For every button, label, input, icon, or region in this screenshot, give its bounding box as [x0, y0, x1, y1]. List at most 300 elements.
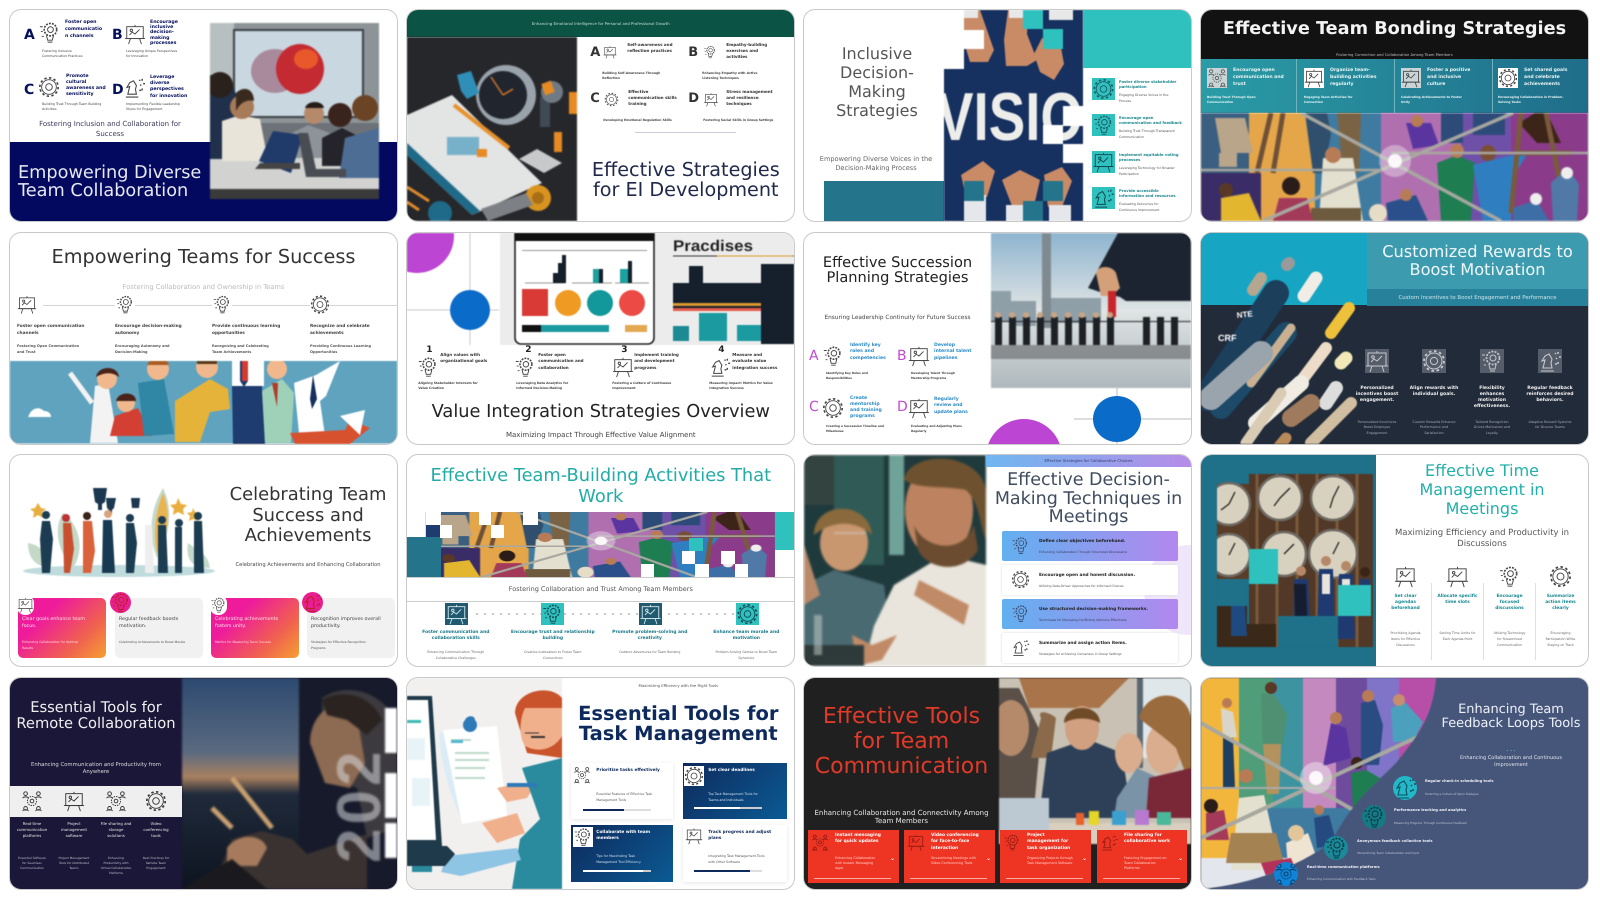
heading: engagement. — [1360, 398, 1394, 403]
icon: presentation board — [124, 24, 146, 44]
panel: Effective Succession Planning Strategies — [804, 232, 1191, 444]
caption: Informed Decision-Making — [516, 386, 562, 390]
heading: Flexibility — [1479, 386, 1505, 390]
caption — [504, 650, 601, 662]
heading: motivation — [733, 636, 760, 641]
heading: Encourage — [150, 20, 178, 25]
title: Remote Collaboration — [16, 715, 176, 732]
column 3 — [1465, 348, 1519, 438]
heading: pipelines — [934, 356, 958, 361]
caption: Fostering a Culture of Open Dialogue — [1425, 792, 1479, 796]
caption — [407, 650, 504, 662]
progress bar — [694, 806, 762, 808]
subtitle — [39, 120, 181, 138]
caption: Engagement — [1366, 431, 1388, 435]
title — [18, 163, 201, 201]
caption — [602, 71, 660, 80]
heading: Allocate specific — [1437, 594, 1478, 599]
letter D: D — [688, 91, 699, 106]
heading: Foster open communication — [17, 324, 84, 328]
heading — [726, 89, 773, 106]
caption: Connection — [1304, 100, 1323, 104]
heading: File sharing and — [101, 820, 131, 826]
caption: Opportunities — [310, 350, 337, 354]
heading: Encourage open and honest discussion. — [1039, 573, 1135, 578]
icon — [685, 826, 703, 844]
caption: Teams and Individuals — [708, 798, 744, 802]
heading: and resilience — [726, 95, 759, 100]
caption: Identifying Key Roles and — [826, 370, 868, 374]
letter C: C — [590, 91, 600, 106]
photo: hand placing a red pawn above a row of figures — [991, 232, 1191, 388]
caption — [17, 342, 79, 354]
tool 3 — [1000, 830, 1091, 882]
icon — [21, 790, 43, 812]
icon — [417, 356, 439, 378]
icon box — [1092, 187, 1115, 209]
caption — [126, 102, 180, 111]
item A — [809, 342, 894, 384]
caption: Enhancing Communication Through — [427, 650, 484, 654]
letter D: D — [112, 82, 124, 98]
heading — [440, 352, 487, 364]
caption: Video Conferencing Tools — [931, 861, 972, 865]
icon — [811, 833, 829, 852]
heading — [596, 830, 650, 842]
caption: Platforms — [1124, 866, 1140, 870]
decorative circles — [944, 382, 1191, 444]
icon: book — [604, 46, 616, 58]
icon circle — [1324, 836, 1348, 860]
caption — [1119, 166, 1175, 177]
tool 4 — [683, 824, 787, 882]
heading: communication and — [1233, 75, 1284, 80]
heading: autonomy — [115, 330, 139, 336]
heading: Foster open — [538, 352, 566, 356]
caption: Developing Talent Through — [911, 370, 955, 374]
activity 1 — [407, 603, 504, 663]
heading — [634, 352, 679, 371]
panel: Effective Time Management in Meetings — [1201, 455, 1588, 666]
heading: and training — [850, 408, 882, 413]
tool 1 — [571, 762, 673, 818]
photo: man at a laptop overlooking a night city, with 202 numerals — [182, 678, 397, 888]
letter B: B — [112, 27, 123, 43]
caption: Enhancing Collaboration Through Structured Discussions — [1039, 550, 1127, 554]
letter: A — [809, 348, 819, 364]
caption: Engagement — [146, 866, 166, 870]
decorative circles and dashboard photo — [407, 232, 794, 344]
heading: Define clear objectives beforehand. — [1039, 539, 1125, 544]
heading: channels — [17, 330, 39, 336]
caption: Participation While — [1546, 637, 1575, 641]
heading — [1485, 594, 1534, 613]
heading: perspectives — [150, 87, 184, 92]
caption: Aligning Stakeholder Interests for — [418, 380, 478, 384]
caption — [1536, 631, 1585, 649]
icon box — [1092, 114, 1115, 136]
letter: B — [897, 348, 907, 364]
caption: Team Achievements — [212, 350, 251, 354]
tool 2 — [683, 762, 787, 818]
caption: Techniques for Managing Conflicting Opinions Effectively — [1039, 618, 1127, 622]
caption — [22, 640, 78, 651]
caption: for Seamless — [22, 860, 42, 864]
caption — [115, 342, 170, 354]
caption — [1401, 95, 1462, 105]
heading: Align values with — [440, 352, 480, 356]
caption: with Instant Messaging — [835, 861, 873, 865]
heading: Video conferencing — [931, 833, 979, 838]
heading — [726, 42, 767, 59]
icon — [573, 766, 591, 784]
heading: programs — [850, 414, 875, 419]
icon — [907, 833, 925, 852]
subtitle: Team Members — [875, 817, 928, 825]
heading — [119, 616, 178, 630]
heading: Self-awareness and — [627, 42, 673, 47]
caption — [709, 380, 773, 391]
heading — [311, 616, 381, 630]
heading: Recognize and celebrate — [310, 324, 370, 328]
caption: Discussions — [1396, 643, 1415, 647]
heading: training — [628, 101, 647, 106]
chevron: ⌄ — [1178, 855, 1183, 862]
heading: communication — [17, 826, 47, 832]
caption — [136, 856, 176, 870]
caption: Communication — [1497, 643, 1522, 647]
caption: Participation — [1119, 172, 1139, 176]
caption: Apps — [835, 866, 843, 870]
heading: Set clear deadlines — [708, 768, 755, 772]
title: Strategies — [836, 101, 918, 120]
heading — [136, 820, 176, 838]
heading: Anonymous feedback collection tools — [1357, 838, 1433, 842]
subtitle: Enhancing Collaboration and Connectivity Among — [814, 808, 989, 816]
column 3 — [1395, 59, 1493, 113]
caption: Productivity with — [103, 860, 129, 864]
heading: platforms — [23, 832, 41, 838]
icon — [612, 356, 634, 378]
heading: Foster a positive — [1427, 68, 1470, 73]
caption: Tailored Recognition — [1475, 420, 1509, 424]
caption: Prioritizing Agenda — [1390, 631, 1421, 635]
subtitle: Custom Incentives to Boost Engagement and Performance — [1399, 294, 1556, 300]
heading: techniques — [726, 101, 752, 106]
heading: achievements — [310, 330, 344, 336]
heading: decision- — [150, 30, 174, 35]
tool 4 — [136, 788, 176, 880]
heading: information and resources — [1119, 193, 1176, 198]
caption: Remote Team — [146, 860, 166, 864]
step 2 — [514, 346, 609, 392]
caption: Custom Rewards Enhance — [1413, 420, 1455, 424]
caption: Providing Continuous Learning — [310, 344, 371, 348]
caption — [418, 380, 478, 391]
icon box — [1092, 151, 1115, 173]
heading: exercises and — [726, 48, 758, 53]
icon: gear bulb — [40, 22, 58, 43]
caption: Celebrating Achievements to Foster — [1401, 95, 1462, 99]
title: Achievements — [245, 525, 371, 546]
teal header block — [1201, 232, 1588, 304]
heading: programs — [634, 364, 656, 370]
subtitle — [1376, 528, 1588, 550]
caption: Building Self-Awareness Through — [602, 71, 660, 75]
caption: Fostering a Culture of Continuous — [612, 380, 671, 384]
title: Success and — [252, 504, 364, 526]
caption — [1433, 631, 1482, 643]
icon circle — [1274, 862, 1298, 886]
panel: Effective Team Bonding Strategies — [1201, 10, 1588, 221]
caption: Teams — [69, 866, 79, 870]
caption — [911, 370, 955, 380]
item C — [24, 74, 106, 111]
title: Boost Motivation — [1409, 260, 1546, 278]
heading: building — [542, 636, 563, 641]
black header — [1201, 10, 1588, 59]
heading: Develop — [934, 342, 955, 348]
caption: Loyalty — [1486, 431, 1498, 435]
panel: Empowering Diverse Team Collaboration — [10, 10, 397, 221]
title: Management in — [1419, 480, 1545, 499]
caption — [596, 790, 652, 803]
icon — [1304, 68, 1324, 88]
subtitle: Improvement — [1494, 762, 1528, 768]
icon — [1207, 68, 1227, 88]
icon — [63, 790, 85, 812]
icon — [709, 356, 731, 378]
panel: Effective Strategies for EI Development — [407, 10, 794, 221]
subtitle — [804, 808, 999, 826]
heading: inclusive — [150, 25, 173, 30]
caption — [1124, 856, 1167, 871]
heading — [732, 352, 777, 371]
activity 2 — [504, 603, 601, 663]
caption: Team Collaboration — [1124, 861, 1156, 865]
card 4 — [307, 598, 395, 658]
subtitle: Discussions — [1457, 539, 1507, 549]
heading: File sharing for — [1124, 833, 1162, 838]
heading: Stress management — [726, 89, 773, 94]
heading — [1124, 833, 1170, 846]
heading — [150, 74, 187, 99]
panel: Essential Tools for Remote Collaboration — [10, 678, 397, 888]
caption: Building Trust Through Team Building — [42, 102, 101, 106]
number: 3 — [621, 344, 628, 354]
heading: awareness and — [66, 86, 106, 91]
item 4 — [1092, 187, 1187, 216]
step 1 — [17, 292, 107, 358]
heading — [22, 616, 85, 630]
heading — [115, 322, 182, 336]
heading: Create — [850, 396, 867, 400]
heading: management — [61, 826, 87, 832]
card 1 — [18, 598, 106, 658]
title: Team Collaboration — [18, 181, 188, 201]
heading — [1381, 594, 1430, 613]
number: 4 — [718, 344, 725, 354]
caption — [826, 424, 884, 434]
icon band — [10, 786, 182, 816]
icon — [17, 294, 37, 314]
heading: creativity — [638, 636, 662, 641]
panel: Empowering Teams for Success — [10, 232, 397, 444]
heading — [1119, 79, 1176, 89]
caption: Implementing Flexible Leadership — [126, 102, 180, 106]
heading: Encourage — [1496, 594, 1523, 599]
heading: Project — [1027, 833, 1045, 838]
heading — [1350, 386, 1404, 404]
title: Effective Tools — [823, 704, 980, 728]
caption — [12, 856, 52, 870]
icon — [1011, 638, 1030, 657]
title: Effective Team Bonding Strategies — [1223, 19, 1566, 39]
caption: Activities — [42, 107, 57, 111]
chevron: ⌄ — [890, 855, 895, 862]
heading: internal talent — [934, 349, 971, 354]
column 3 — [1485, 565, 1534, 655]
item B — [688, 42, 767, 80]
item A — [24, 20, 102, 58]
heading: Set shared goals — [1524, 68, 1567, 73]
panel: Value Integration Strategies Overview — [407, 232, 794, 444]
caption — [702, 71, 758, 80]
title — [1434, 702, 1588, 730]
caption: Setting Time Limits for — [1439, 631, 1476, 635]
heading — [215, 616, 278, 630]
caption: Collaborative Challenges — [436, 656, 476, 660]
heading: Clear goals enhance team — [22, 617, 85, 622]
icon: bulb badge — [210, 595, 227, 615]
heading: reflection practices — [627, 48, 672, 53]
letter B: B — [688, 45, 698, 60]
caption — [516, 380, 568, 391]
column 1 — [1201, 59, 1297, 113]
heading: review and — [934, 403, 963, 408]
heading — [310, 322, 370, 336]
icon circle — [1362, 804, 1386, 828]
letter A: A — [590, 45, 600, 60]
caption: Satisfaction — [1424, 431, 1444, 435]
heading: members — [596, 836, 619, 841]
step 3 — [212, 292, 302, 358]
green header with subtitle: Enhancing Emotional Intelligence for Personal and Professional Growth — [532, 21, 670, 26]
caption: Each Agenda Point — [1443, 637, 1472, 641]
heading: Real-time communication platforms — [1307, 864, 1380, 868]
title: Meetings — [1049, 507, 1128, 527]
caption — [1407, 420, 1461, 437]
title — [407, 466, 794, 507]
subtitle: Maximizing Efficiency and Productivity in — [1395, 528, 1569, 538]
item A — [590, 42, 673, 80]
title — [215, 485, 401, 546]
caption: Items for Effective — [1391, 637, 1420, 641]
option 3 — [1002, 599, 1178, 629]
heading — [850, 342, 886, 363]
heading — [150, 20, 178, 46]
subtitle: Fostering Connection and Collaboration Among Team Members — [1336, 53, 1453, 57]
title: Essential Tools for — [578, 702, 778, 724]
caption — [212, 342, 269, 354]
option 4 — [1002, 633, 1178, 663]
subtitle — [1434, 754, 1588, 768]
heading: Leverage — [150, 75, 174, 80]
heading: Align rewards with — [1410, 386, 1458, 390]
caption — [911, 424, 962, 434]
heading: Encourage trust and relationship — [511, 630, 595, 635]
icon — [1100, 833, 1118, 852]
heading: Regular feedback — [1527, 386, 1573, 390]
heading — [601, 630, 698, 642]
title: Meetings — [1446, 499, 1518, 518]
heading: building activities — [1330, 75, 1377, 80]
heading — [1119, 115, 1182, 125]
caption — [612, 380, 671, 391]
title: for EI Development — [593, 178, 779, 201]
caption: and Trust — [17, 350, 36, 354]
heading: Project — [67, 820, 81, 826]
title — [592, 158, 780, 201]
caption — [1304, 95, 1352, 105]
heading: tools — [151, 832, 161, 838]
tool 3 — [96, 788, 136, 880]
icon — [1422, 348, 1446, 372]
heading: evaluate value — [732, 358, 766, 363]
title — [1376, 461, 1588, 518]
title: for Team — [854, 728, 949, 754]
caption: Process — [1119, 98, 1131, 102]
caption: Responsibilities — [826, 376, 852, 380]
caption: Integration Success — [709, 386, 744, 390]
icon: chart — [704, 93, 718, 106]
caption — [1485, 631, 1534, 649]
caption: Results — [22, 646, 33, 650]
title: Celebrating Team — [230, 484, 386, 505]
heading: discussions — [1495, 606, 1524, 611]
green header with subtitle — [407, 10, 794, 37]
heading: Performance tracking and analytics — [1394, 808, 1466, 812]
heading: incentives boost — [1356, 392, 1398, 397]
tool 2 — [1362, 804, 1582, 830]
caption — [1119, 202, 1159, 213]
illustration: person with a clipboard at a monitor — [407, 678, 562, 888]
caption: Enhancing Collaboration for Optimal — [22, 640, 78, 644]
icon: lightbulb — [704, 46, 715, 58]
heading: action items — [1545, 600, 1576, 605]
caption — [1381, 631, 1430, 649]
letter C: C — [24, 82, 34, 98]
caption — [931, 856, 976, 866]
column 2 — [1407, 348, 1461, 438]
heading: for face-to-face — [931, 839, 969, 844]
heading: Personalized — [1360, 386, 1394, 390]
icon — [1401, 68, 1421, 88]
tool 3 — [571, 824, 673, 882]
teal block top right — [1083, 10, 1191, 68]
heading: reinforces desired — [1526, 392, 1574, 397]
navy title band — [10, 142, 397, 221]
progress bar — [583, 870, 651, 872]
heading — [12, 820, 52, 838]
title: Feedback Loops Tools — [1442, 716, 1580, 730]
icon: gears — [604, 92, 618, 106]
caption: Evaluating and Adjusting Plans — [911, 424, 962, 428]
teal strategy band — [1201, 59, 1588, 113]
photo: clock, papers and gears — [407, 36, 578, 221]
caption: Virtual Collaboration — [101, 866, 131, 870]
caption: Communication — [1119, 134, 1144, 138]
